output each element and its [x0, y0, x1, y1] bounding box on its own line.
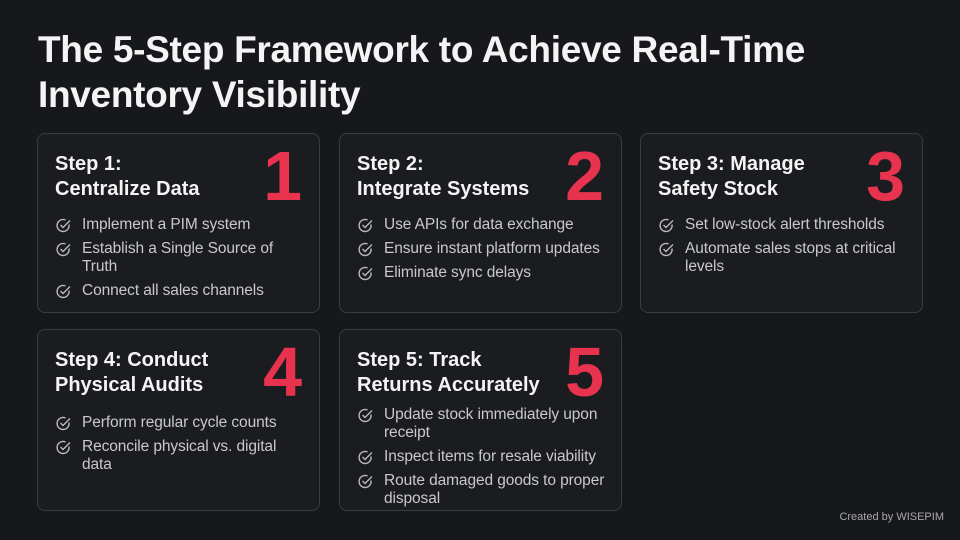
list: Use APIs for data exchange	[384, 216, 574, 233]
list: Implement a PIM system	[82, 216, 250, 233]
heading: Step 2:	[357, 153, 424, 175]
list	[358, 216, 600, 281]
list: Reconcile physical vs. digital	[82, 438, 276, 455]
title: Inventory Visibility	[38, 74, 360, 115]
heading: Physical Audits	[55, 374, 203, 396]
list: Perform regular cycle counts	[82, 414, 276, 431]
panel: step 2	[339, 133, 622, 313]
list: receipt	[384, 424, 430, 441]
panel: step 3	[640, 133, 923, 313]
number: 2	[565, 137, 604, 215]
panel: step 5	[339, 329, 622, 511]
title	[38, 29, 805, 115]
number: 5	[565, 333, 604, 411]
heading: Centralize Data	[55, 178, 200, 200]
heading	[55, 153, 200, 200]
heading	[357, 349, 540, 396]
list: Automate sales stops at critical	[685, 240, 895, 257]
number: 4	[263, 333, 302, 411]
heading	[55, 349, 208, 396]
list: Route damaged goods to proper	[384, 472, 604, 489]
heading	[658, 153, 805, 200]
list	[659, 216, 895, 275]
list: Eliminate sync delays	[384, 264, 531, 281]
heading: Step 3: Manage	[658, 153, 805, 175]
list: levels	[685, 258, 724, 275]
panel: step 1	[37, 133, 320, 313]
list: Establish a Single Source of	[82, 240, 273, 257]
list	[56, 216, 274, 299]
heading: Returns Accurately	[357, 374, 540, 396]
list: Connect all sales channels	[82, 282, 264, 299]
heading	[357, 153, 529, 200]
list: data	[82, 456, 112, 473]
number: 1	[263, 137, 302, 215]
heading: Safety Stock	[658, 178, 778, 200]
panel: step 4	[37, 329, 320, 511]
footer credit: Created by WISEPIM	[839, 511, 944, 523]
number: 3	[866, 137, 905, 215]
list: disposal	[384, 490, 440, 507]
list: Update stock immediately upon	[384, 406, 597, 423]
list	[358, 406, 604, 507]
heading: Step 4: Conduct	[55, 349, 208, 371]
title: The 5-Step Framework to Achieve Real-Time	[38, 29, 805, 70]
heading: Integrate Systems	[357, 178, 529, 200]
heading: Step 5: Track	[357, 349, 482, 371]
list: Set low-stock alert thresholds	[685, 216, 884, 233]
list: Inspect items for resale viability	[384, 448, 596, 465]
list: Truth	[82, 258, 117, 275]
heading: Step 1:	[55, 153, 122, 175]
list	[56, 414, 276, 473]
list: Ensure instant platform updates	[384, 240, 600, 257]
